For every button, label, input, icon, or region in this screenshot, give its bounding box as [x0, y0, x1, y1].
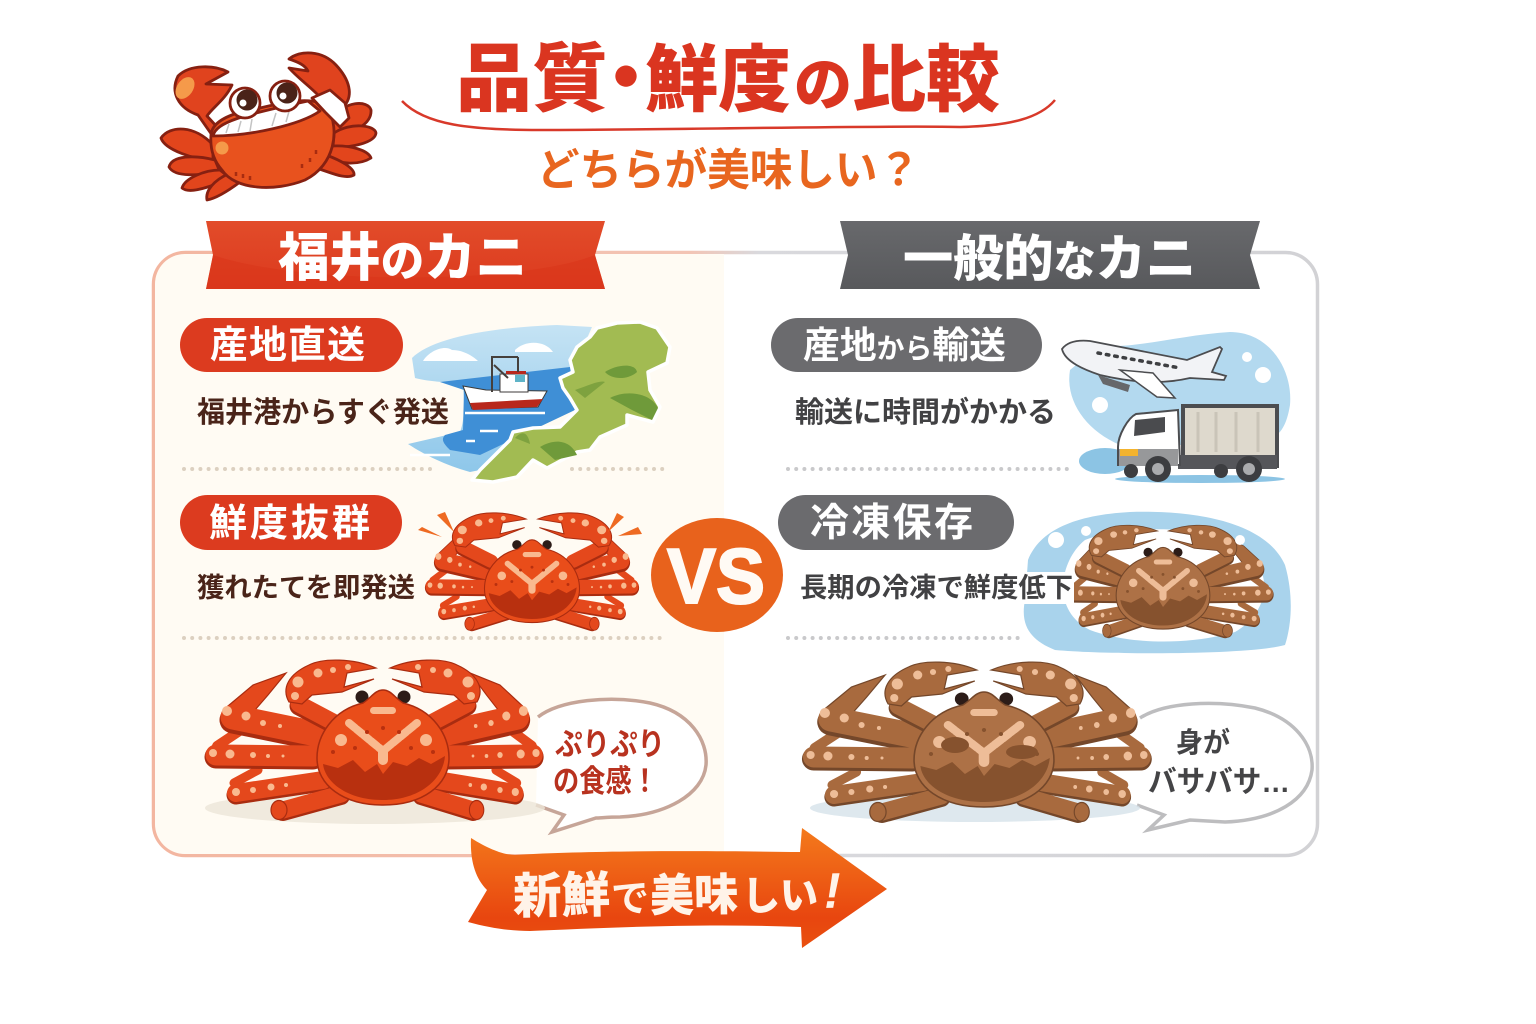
- panel: Fukui crab: [180, 221, 706, 832]
- illustration: boat and coast map: [408, 322, 670, 482]
- divider: [184, 467, 667, 471]
- speech bubble: texture: バサバサ…: [1148, 766, 1290, 799]
- illustration: large frozen crab: [807, 662, 1148, 822]
- illustration: large fresh crab: [205, 660, 545, 824]
- item: shipped from origin: 輸送に時間がかかる: [795, 395, 1056, 429]
- illustration: small fresh crab: [418, 512, 642, 630]
- subtitle: どちらが美味しい？: [537, 146, 920, 195]
- speech bubble: texture: [536, 699, 706, 832]
- item: direct from origin: [180, 318, 449, 429]
- divider: [184, 636, 666, 640]
- arrow banner: 新鮮: [513, 869, 610, 924]
- item: frozen storage: [778, 495, 1014, 550]
- title: の: [794, 53, 852, 118]
- mascot crab: [161, 53, 376, 200]
- illustration: frozen crab: [1024, 512, 1291, 653]
- VS badge: [651, 518, 783, 632]
- title: 比較: [852, 40, 1000, 121]
- item: frozen storage: 冷凍保存: [810, 502, 973, 545]
- speech bubble: texture: ぷりぷり: [555, 727, 665, 762]
- banner: ordinary crab: 一般的なカニ: [903, 231, 1196, 287]
- speech bubble: texture: 身が: [1176, 726, 1230, 758]
- item: outstanding freshness: 獲れたてを即発送: [197, 573, 415, 603]
- speech bubble: texture: の食感！: [553, 764, 658, 799]
- banner: Fukui crab: [206, 221, 605, 289]
- divider: [788, 467, 1072, 471]
- arrow banner: で: [611, 878, 649, 921]
- item: outstanding freshness: [180, 495, 415, 603]
- banner: Fukui crab: 福井のカニ: [278, 230, 527, 288]
- panel frame: [154, 252, 1318, 856]
- illustration: plane and truck: [1062, 332, 1290, 483]
- speech bubble: texture: [1137, 703, 1312, 830]
- item: shipped from origin: [771, 318, 1056, 429]
- item: shipped from origin: 産地から輸送: [803, 325, 1006, 366]
- item: direct from origin: 福井港からすぐ発送: [197, 396, 449, 429]
- item: direct from origin: 産地直送: [210, 325, 365, 367]
- title: ・: [588, 37, 664, 122]
- arrow banner: [468, 828, 887, 948]
- arrow banner: !: [824, 863, 841, 919]
- title: [402, 37, 1055, 130]
- panel: ordinary crab: [771, 221, 1312, 830]
- title: 鮮度: [645, 40, 791, 121]
- divider: [788, 636, 1022, 640]
- arrow banner: しい: [742, 874, 818, 919]
- arrow banner: 美味: [650, 869, 738, 921]
- title: 品質: [456, 37, 608, 121]
- item: outstanding freshness: 鮮度抜群: [209, 503, 370, 545]
- caption: quality drop: 長期の冷凍で鮮度低下: [800, 573, 1073, 603]
- banner: ordinary crab: [840, 221, 1260, 289]
- VS badge: VS: [667, 532, 765, 620]
